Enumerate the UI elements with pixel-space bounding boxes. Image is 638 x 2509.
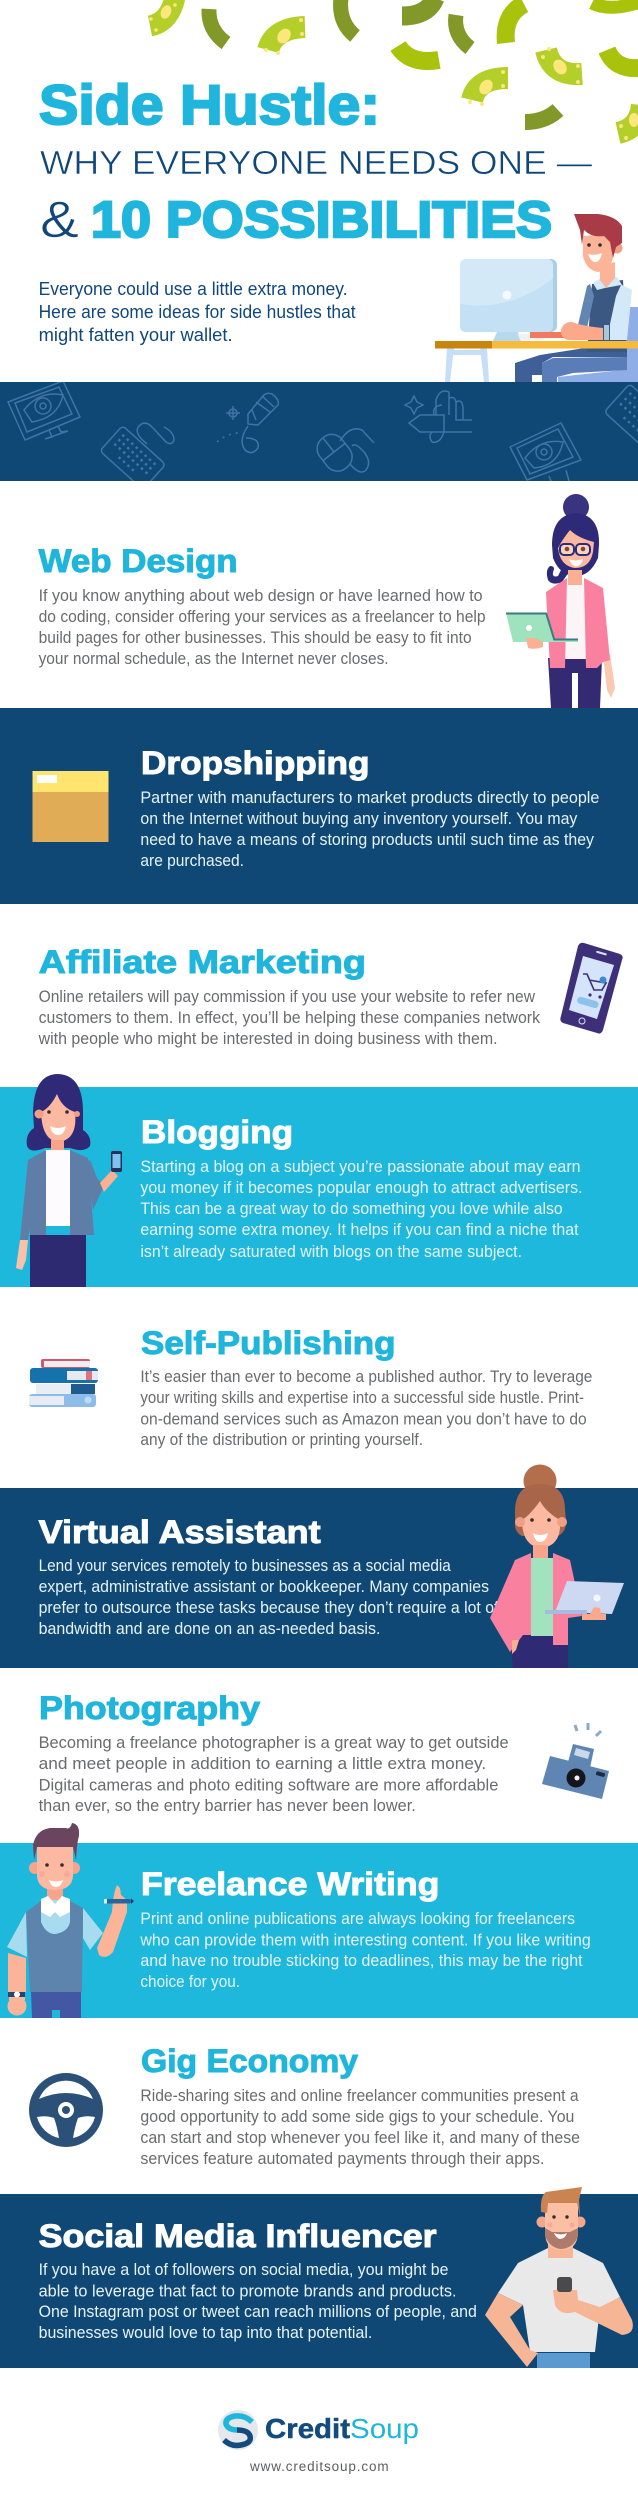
text block: Gig Economy: can start and stop whenever you feel like it, and many of these <box>140 2129 580 2147</box>
text block: Self-Publishing: your writing skills and expertise into a successful side hustle. Print- <box>140 1389 584 1407</box>
title ampersand: & <box>40 191 79 248</box>
wordmark: Soup: Soup <box>350 2413 419 2444</box>
intro text: might fatten your wallet. <box>39 325 233 345</box>
text block: Social Media Influencer: One Instagram post or tweet can reach millions of people, and <box>39 2303 477 2321</box>
heading: Web Design: Web Design <box>39 543 238 579</box>
text block: Photography: and meet people in addition to earning a little extra money. <box>39 1755 486 1773</box>
intro text: Here are some ideas for side hustles that <box>39 302 356 322</box>
panel: Photography <box>39 1690 609 1815</box>
wordmark: Credit: Credit <box>265 2413 350 2444</box>
illustration: man with pen <box>7 1823 134 2018</box>
title <box>39 73 592 248</box>
intro text: Everyone could use a little extra money. <box>39 279 348 299</box>
text block: Photography: Becoming a freelance photographer is a great way to get outside <box>39 1734 509 1752</box>
illustration: woman with glasses and tablet <box>506 494 615 708</box>
text block: Dropshipping: on the Internet without buying any inventory yourself. You may <box>140 810 578 828</box>
text block: Dropshipping <box>140 789 599 870</box>
panel: Affiliate Marketing <box>38 943 623 1048</box>
text block: Freelance Writing: who can provide them with interesting content. If you like writing <box>139 1932 591 1950</box>
text block: Self-Publishing: It’s easier than ever to become a published author. Try to leverage <box>140 1368 592 1386</box>
text block: Affiliate Marketing: Online retailers will pay commission if you use your website to refer new <box>39 988 535 1006</box>
illustration: woman with phone <box>16 1074 122 1287</box>
text block: Freelance Writing: and have no trouble sticking to deadlines, this may be the right <box>140 1952 583 1970</box>
text block: Social Media Influencer: businesses would love to tap into that potential. <box>39 2324 372 2342</box>
falling money illustration <box>149 0 638 140</box>
heading: Affiliate Marketing: Affiliate Marketing <box>39 944 366 980</box>
heading: Social Media Influencer: Social Media Influencer <box>39 2218 437 2254</box>
panel: Dropshipping <box>0 708 638 904</box>
panel: Web Design <box>39 494 615 708</box>
title line: why everyone needs one: WHY EVERYONE NEEDS ONE — <box>40 144 592 181</box>
title line: 10 possibilities: 10 POSSIBILITIES <box>91 191 552 248</box>
text block: Photography: Digital cameras and photo editing software are more affordable <box>39 1776 498 1794</box>
heading: Photography: Photography <box>39 1690 260 1726</box>
panel: Self-Publishing <box>29 1325 592 1449</box>
text block: Virtual Assistant: Lend your services remotely to businesses as a social media <box>39 1557 452 1575</box>
icon: cardboard box <box>32 771 108 842</box>
text block: Web Design: your normal schedule, as the Internet never closes. <box>39 650 389 668</box>
text block: Freelance Writing: Print and online publications are always looking for freelancers <box>140 1910 575 1928</box>
text block: Freelance Writing: choice for you. <box>140 1973 240 1991</box>
text block: Dropshipping: are purchased. <box>140 852 244 870</box>
text block: Web Design: do coding, consider offering your services as a freelancer to help <box>39 608 486 626</box>
panel: Virtual Assistant <box>0 1464 638 1668</box>
illustration: woman with laptop <box>490 1464 624 1668</box>
panel: Gig Economy <box>29 2043 580 2168</box>
heading: Freelance Writing: Freelance Writing <box>141 1866 439 1902</box>
icon: steering wheel <box>29 2073 103 2147</box>
text block: Virtual Assistant: bandwidth and are done on an as-needed basis. <box>39 1620 380 1638</box>
illustration: bearded man with phone <box>485 2187 633 2368</box>
text block: Dropshipping: Partner with manufacturers to market products directly to people <box>140 789 599 807</box>
illustration: man working at desk <box>435 214 638 382</box>
panel: Blogging <box>0 1074 638 1287</box>
text block: Blogging: This can be a great way to do something you love while also <box>140 1200 563 1218</box>
text block: Social Media Influencer: If you have a lot of followers on social media, you might be <box>39 2261 448 2279</box>
text block: Blogging: Starting a blog on a subject you’re passionate about may earn <box>140 1158 581 1176</box>
text block: Affiliate Marketing <box>38 988 541 1048</box>
panel: Social Media Influencer <box>0 2187 638 2368</box>
intro text <box>39 279 356 345</box>
text block: Gig Economy: services feature automated payments through their apps. <box>140 2150 544 2168</box>
text block: Self-Publishing <box>140 1368 592 1449</box>
logo: CreditSoup <box>218 2410 419 2474</box>
text block: Photography: than ever, so the entry barrier has never been lower. <box>39 1797 416 1815</box>
text block: Gig Economy: Ride-sharing sites and online freelancer communities present a <box>140 2087 579 2105</box>
heading: Self-Publishing: Self-Publishing <box>141 1325 396 1361</box>
line icons <box>8 381 638 490</box>
text block: Blogging: you money if it becomes popular enough to attract advertisers. <box>140 1179 583 1197</box>
text block: Web Design <box>39 587 486 668</box>
text block: Affiliate Marketing: with people who might be interested in doing business with them. <box>38 1030 498 1048</box>
text block: Self-Publishing: on-demand services such as Amazon mean you don’t have to do <box>140 1410 587 1428</box>
text block: Freelance Writing <box>139 1910 591 1991</box>
heading: Gig Economy: Gig Economy <box>141 2043 358 2079</box>
text block: Self-Publishing: any of the distribution or printing yourself. <box>140 1431 423 1449</box>
text block: Photography <box>39 1734 509 1815</box>
panel: Freelance Writing <box>0 1823 638 2018</box>
text block: Web Design: build pages for other businesses. This should be easy to fit into <box>39 629 472 647</box>
text block: Gig Economy: good opportunity to add some side gigs to your schedule. You <box>140 2108 574 2126</box>
text block: Virtual Assistant: expert, administrative assistant or bookkeeper. Many companies <box>39 1578 489 1596</box>
icon: stack of books <box>29 1359 98 1407</box>
website URL: www.creditsoup.com <box>249 2459 389 2474</box>
icon: CreditSoup mark <box>218 2410 258 2450</box>
text block: Social Media Influencer: able to leverage that fact to promote brands and products. <box>39 2282 456 2300</box>
text block: Affiliate Marketing: customers to them. In effect, you’ll be helping these companies network <box>39 1009 541 1027</box>
text block: Dropshipping: need to have a means of storing products until such time as they <box>140 831 595 849</box>
heading: Blogging: Blogging <box>141 1114 293 1150</box>
title line: Side Hustle: Side Hustle: <box>39 73 380 136</box>
heading: Dropshipping: Dropshipping <box>141 745 370 781</box>
text block: Blogging: isn’t already saturated with blogs on the same subject. <box>140 1243 522 1261</box>
text block: Blogging: earning some extra money. It helps if you can find a niche that <box>140 1221 579 1239</box>
text block: Social Media Influencer <box>39 2261 477 2342</box>
text block: Web Design: If you know anything about web design or have learned how to <box>39 587 483 605</box>
text block: Blogging <box>140 1158 583 1261</box>
text block: Gig Economy <box>140 2087 580 2168</box>
text block: Virtual Assistant <box>39 1557 499 1638</box>
icon: smartphone with shopping cart <box>560 943 623 1034</box>
icon: camera <box>542 1723 609 1799</box>
heading: Virtual Assistant: Virtual Assistant <box>39 1514 321 1550</box>
text block: Virtual Assistant: prefer to outsource these tasks because they don’t require a lot of <box>39 1599 499 1617</box>
decorative band with line icons <box>0 381 638 490</box>
